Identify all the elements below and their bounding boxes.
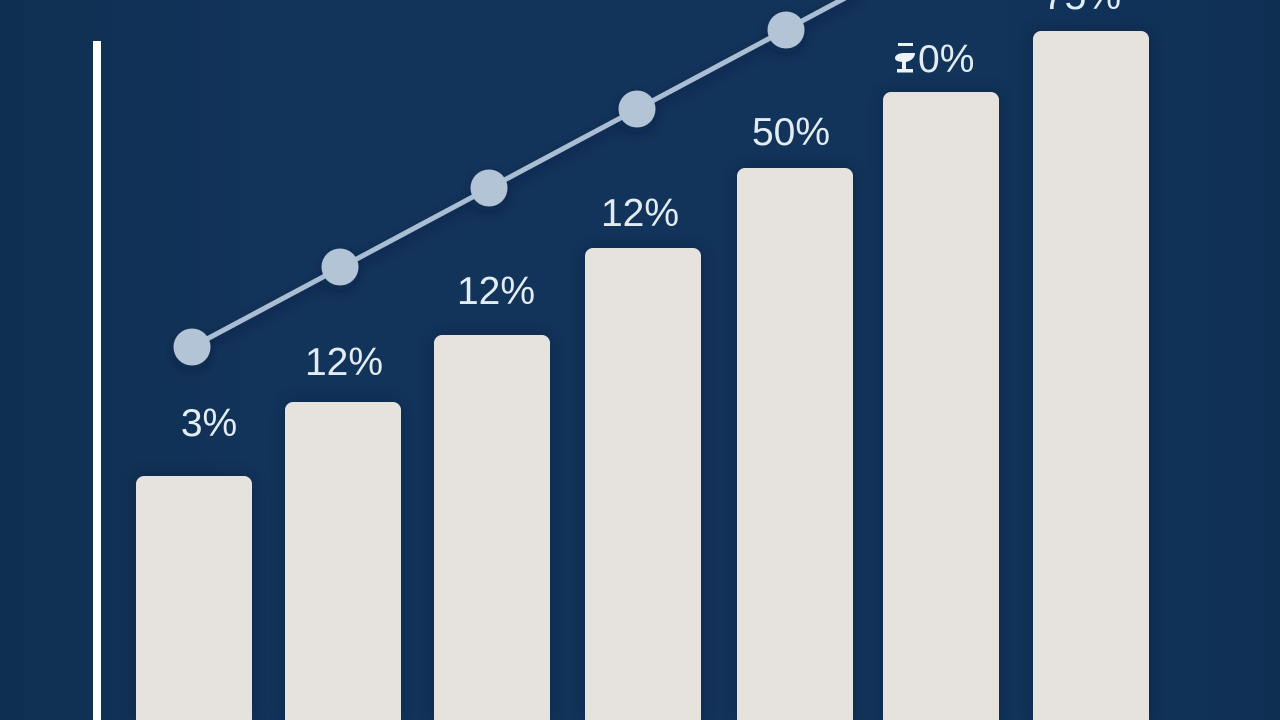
bar 3 <box>434 335 550 720</box>
bar 2 <box>285 402 401 720</box>
bar 7 <box>1033 31 1149 720</box>
bar 5 <box>737 168 853 720</box>
label: 50%: 50% <box>752 111 830 154</box>
y axis <box>93 41 101 720</box>
label: 12% first: 12% <box>305 341 383 384</box>
bar 1 <box>136 476 252 720</box>
bar 4 <box>585 248 701 720</box>
icon: glyph artifact <box>895 43 915 72</box>
bar 6 <box>883 92 999 720</box>
label: 12% second: 12% <box>457 270 535 313</box>
label: 0% with glyph: 0% <box>918 38 974 81</box>
label: 12% third: 12% <box>601 192 679 235</box>
label: 3%: 3% <box>181 402 237 445</box>
